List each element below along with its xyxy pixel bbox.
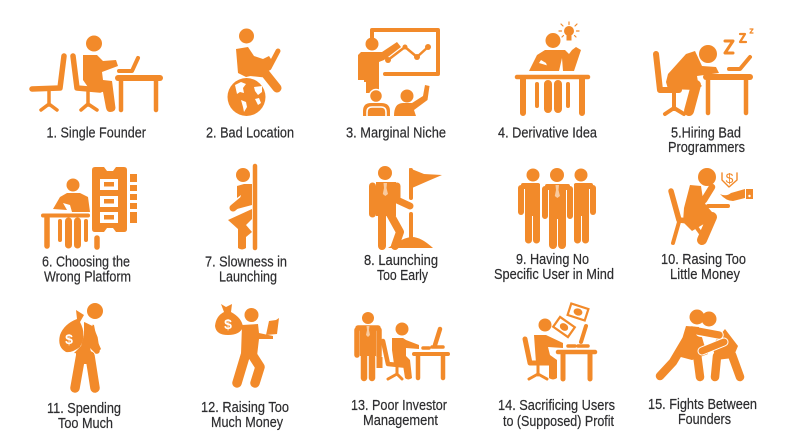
label: 3. Marginal Niche — [346, 124, 446, 142]
panel: 13 poor investor management — [351, 312, 448, 429]
icon: programmer asleep at desk — [656, 29, 753, 114]
label — [205, 254, 287, 286]
label: Too Much — [58, 415, 113, 432]
label: Wrong Platform — [44, 268, 131, 286]
panel: 15 fights between founders — [648, 310, 757, 428]
label: 4. Derivative Idea — [498, 124, 598, 142]
label — [498, 397, 615, 430]
icon: three standing people — [521, 168, 593, 245]
label — [201, 399, 289, 431]
label: 5.Hiring Bad — [671, 124, 741, 142]
icon: person with laptop sitting on globe — [228, 28, 278, 116]
label: 10. Rasing Too — [661, 251, 746, 268]
panel: 5 hiring bad programmers — [656, 29, 753, 156]
panel: 8 launching too early — [364, 166, 442, 284]
label — [668, 124, 745, 156]
icon: person with money bag and book: $ — [224, 316, 232, 332]
icon: person leaning on pole — [228, 166, 255, 250]
label: 13. Poor Investor — [351, 397, 447, 414]
panel: 9 having no specific user in mind — [494, 168, 614, 283]
icon: investor standing behind seated worker at desk — [357, 312, 448, 380]
icon: businessman with flag on mound — [372, 166, 442, 248]
label: 11. Spending — [47, 400, 121, 417]
label: Management — [363, 412, 439, 429]
label: 7. Slowness in — [205, 254, 287, 270]
label: 6. Choosing the — [42, 254, 130, 270]
label: Little Money — [670, 266, 740, 283]
icon: presenter with chart and audience — [358, 30, 438, 116]
label: 15. Fights Between — [648, 396, 757, 413]
panel: 10 raising too little money — [661, 168, 753, 283]
label: 12. Raising Too — [201, 399, 289, 416]
icon: seated person with hand holding little money: $ — [726, 170, 734, 186]
panel: 6 choosing the wrong platform — [42, 167, 137, 286]
label: Specific User in Mind — [494, 266, 614, 283]
label: Programmers — [668, 139, 745, 156]
panel: 4 derivative idea — [498, 22, 598, 142]
panel: 12 raising too much money — [201, 304, 289, 431]
label: to (Supposed) Profit — [503, 413, 615, 430]
icon: founder at desk beside empty chair — [32, 36, 160, 112]
icon: person carrying money bag on back: $ — [65, 331, 73, 347]
label: 2. Bad Location — [206, 124, 294, 142]
icon: worker at desk with flying banknotes — [525, 304, 595, 380]
label: Launching — [219, 268, 277, 286]
icon: thinker at desk with light bulb — [517, 22, 588, 113]
label — [364, 252, 438, 284]
panel: 7 slowness in launching — [205, 166, 287, 286]
label — [648, 396, 757, 428]
panel: 2 bad location — [206, 28, 294, 142]
label — [42, 254, 131, 286]
icon: two founders wrestling — [660, 310, 740, 377]
panel: 3 marginal niche — [346, 30, 446, 142]
panel: 1 single founder — [32, 36, 160, 142]
label — [661, 251, 746, 283]
label: Much Money — [211, 414, 283, 431]
label: 8. Launching — [364, 252, 438, 269]
label: Too Early — [377, 267, 428, 284]
panel: 11 spending too much — [47, 303, 121, 432]
label — [47, 400, 121, 432]
label: 9. Having No — [516, 251, 589, 268]
label: 1. Single Founder — [46, 124, 146, 142]
panel: 14 sacrificing users to profit — [498, 304, 615, 430]
label: Founders — [678, 411, 731, 428]
label — [351, 397, 447, 429]
label — [494, 251, 614, 283]
label: 14. Sacrificing Users — [498, 397, 615, 414]
icon: worker at desk beside chip — [43, 167, 137, 247]
